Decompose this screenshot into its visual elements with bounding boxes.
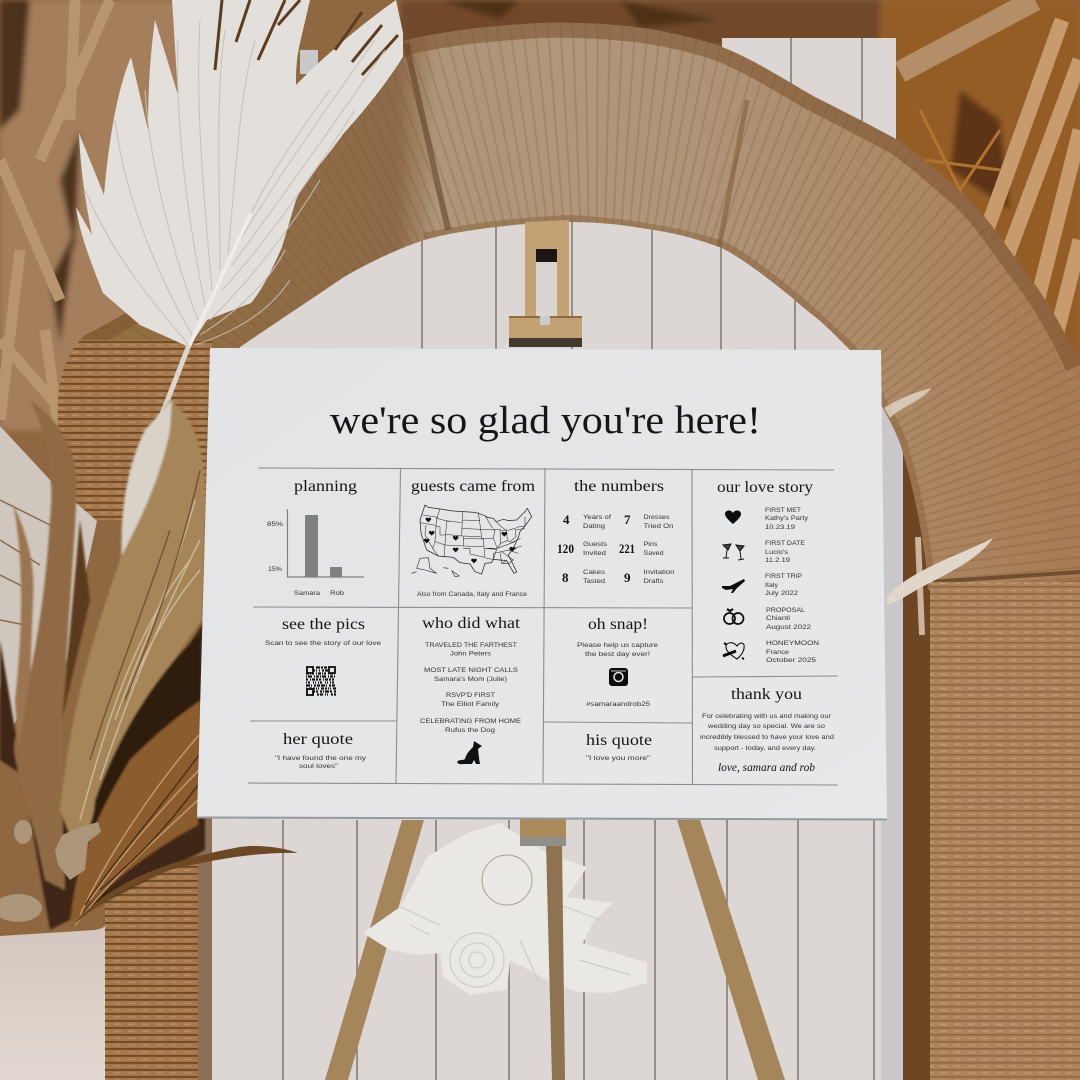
- US map with hearts: [412, 505, 532, 577]
- stat: years of dating: Years of: [583, 514, 611, 521]
- woven rattan posts: [105, 582, 1080, 1080]
- icon: wedding rings: [724, 609, 744, 624]
- woven rattan arch: [58, 22, 1080, 590]
- stat: dresses tried on: Tried On: [644, 523, 674, 530]
- heading: the numbers: the numbers: [574, 478, 664, 495]
- stat: guests invited: Guests: [583, 541, 608, 548]
- milestone: proposal: [766, 607, 811, 631]
- stat: pins saved: 221: [619, 541, 635, 556]
- milestone: first date: 11.2.19: [765, 557, 790, 564]
- award: rsvp'd first: RSVP'D FIRST: [446, 692, 495, 699]
- milestone: first met: [765, 507, 809, 531]
- milestone: honeymoon: France: [766, 649, 789, 656]
- white slatted fence backdrop: [212, 38, 930, 1080]
- photo request text: [577, 642, 658, 658]
- milestone: honeymoon: [766, 640, 819, 664]
- white vase: [0, 925, 105, 1080]
- panel: oh snap: [577, 616, 658, 708]
- milestone: first met: FIRST MET: [765, 507, 801, 514]
- bar chart: 85%: [267, 521, 283, 528]
- stat: invitation drafts: Invitation: [644, 569, 675, 576]
- state hearts: [424, 518, 515, 563]
- stat: guests invited: 120: [557, 541, 574, 556]
- photo request text: Please help us capture: [577, 642, 658, 649]
- award: celebrating from home: [420, 718, 522, 734]
- quote text: [275, 755, 367, 770]
- easel lower clip: [520, 814, 566, 846]
- stat: cakes tasted: Tasted: [583, 578, 605, 585]
- quote text: "I have found the one my: [275, 755, 367, 762]
- bar chart: Samara: [294, 590, 320, 597]
- stat: guests invited: [557, 541, 608, 557]
- icon: dog: [457, 741, 482, 764]
- alaska and hawaii: [412, 558, 459, 577]
- panel: planning: [267, 478, 364, 597]
- panel: who did what: [420, 615, 522, 764]
- bar chart: Rob: [330, 590, 344, 597]
- award: traveled the farthest: John Peters: [450, 650, 492, 658]
- photo request text: the best day ever!: [585, 651, 650, 658]
- sign board: [197, 348, 887, 820]
- heading: his quote: his quote: [586, 732, 652, 749]
- stat: cakes tasted: 8: [562, 570, 569, 585]
- award: rsvp'd first: [441, 692, 500, 708]
- easel top clip: [509, 220, 582, 347]
- panel: thank you: [700, 686, 834, 774]
- panel: guests came from: [411, 478, 536, 598]
- icon: heart with plane: [723, 643, 744, 659]
- stat: invitation drafts: 9: [624, 570, 631, 585]
- heading: who did what: who did what: [422, 615, 521, 632]
- pampas grass: [0, 400, 298, 930]
- stat: years of dating: Dating: [583, 523, 605, 530]
- panel: the numbers: [557, 478, 675, 585]
- thank you message: For celebrating with us and making our: [702, 713, 832, 720]
- icon: champagne glasses: [723, 544, 744, 560]
- icon: instagram camera: [609, 668, 628, 686]
- award: celebrating from home: CELEBRATING FROM HOME: [420, 718, 522, 725]
- award: traveled the farthest: [425, 642, 517, 658]
- left white palm leaves: [0, 426, 97, 725]
- milestone: proposal: August 2022: [766, 624, 811, 631]
- award: most late night calls: Samara's Mom (Julie): [434, 676, 507, 683]
- milestone: proposal: Chianti: [766, 615, 791, 622]
- milestone: first date: FIRST DATE: [765, 540, 805, 547]
- milestone: first trip: Italy: [765, 582, 779, 589]
- award: traveled the farthest: TRAVELED THE FARTHEST: [425, 642, 517, 649]
- milestone: first date: Lucio's: [765, 549, 789, 556]
- grid dividers: [248, 468, 838, 785]
- map footnote: Also from Canada, Italy and France: [417, 591, 527, 598]
- white paper flowers: [363, 823, 647, 995]
- milestone: first met: Kathy's Party: [765, 515, 809, 522]
- heading: her quote: her quote: [283, 731, 353, 748]
- stat: years of dating: 4: [563, 512, 570, 527]
- QR code: [306, 667, 336, 695]
- panel: her quote: [275, 731, 367, 770]
- panel: our love story: [717, 479, 819, 664]
- thank you message: [700, 713, 834, 752]
- right cream feather wisps: [884, 388, 993, 605]
- panel: his quote: [586, 732, 652, 762]
- milestone: first met: 10.23.19: [765, 524, 795, 531]
- milestone: first trip: July 2022: [765, 590, 798, 597]
- award: rsvp'd first: The Elliot Family: [441, 701, 500, 708]
- easel legs: [325, 820, 785, 1080]
- thank you message: support - today, and every day.: [714, 745, 816, 752]
- thank you message: wedding day so special. We are so: [707, 723, 825, 730]
- heading: planning: planning: [294, 478, 357, 495]
- heading: see the pics: see the pics: [282, 616, 365, 633]
- stat: dresses tried on: Dresses: [644, 514, 670, 521]
- bar chart: 15%: [268, 566, 282, 573]
- stat: dresses tried on: 7: [624, 512, 631, 527]
- thank you message: incredibly blessed to have your love and: [700, 734, 834, 741]
- panel: see the pics: [265, 616, 381, 695]
- stat: years of dating: [563, 512, 611, 530]
- stat: invitation drafts: Drafts: [644, 578, 664, 585]
- bar chart: [267, 509, 364, 597]
- stat: cakes tasted: [562, 569, 606, 585]
- signature: love, samara and rob: [718, 760, 815, 774]
- heading: oh snap!: oh snap!: [588, 616, 648, 633]
- quote text: soul loves": [299, 763, 339, 770]
- stat: pins saved: Saved: [644, 550, 664, 557]
- hashtag: #samaraandrob25: [586, 701, 650, 708]
- white palm feather: [76, 0, 403, 445]
- milestone: proposal: PROPOSAL: [766, 607, 805, 614]
- stat: pins saved: Pins: [644, 541, 658, 548]
- quote text: "I love you more": [586, 755, 651, 762]
- heading: our love story: our love story: [717, 479, 813, 496]
- milestone: first date: [765, 540, 805, 564]
- award: most late night calls: [424, 667, 519, 683]
- heading: thank you: thank you: [731, 686, 802, 703]
- stat: dresses tried on: [624, 512, 674, 530]
- icon: heart: [725, 510, 741, 524]
- milestone: first trip: [765, 573, 802, 597]
- easel center post: [546, 843, 565, 1080]
- award: celebrating from home: Rufus the Dog: [445, 727, 495, 734]
- title: we're so glad you're here!: [330, 399, 761, 442]
- stat: pins saved: [619, 541, 664, 557]
- icon: airplane: [722, 579, 745, 593]
- heading: guests came from: guests came from: [411, 478, 536, 495]
- stat: invitation drafts: [624, 569, 675, 585]
- stat: cakes tasted: Cakes: [583, 569, 606, 576]
- award: most late night calls: MOST LATE NIGHT CALLS: [424, 667, 519, 674]
- scan instruction: Scan to see the story of our love: [265, 640, 381, 647]
- stat: guests invited: Invited: [583, 550, 606, 557]
- milestone: first trip: FIRST TRIP: [765, 573, 802, 580]
- milestone: honeymoon: HONEYMOON: [766, 640, 819, 647]
- milestone: honeymoon: October 2025: [766, 657, 816, 664]
